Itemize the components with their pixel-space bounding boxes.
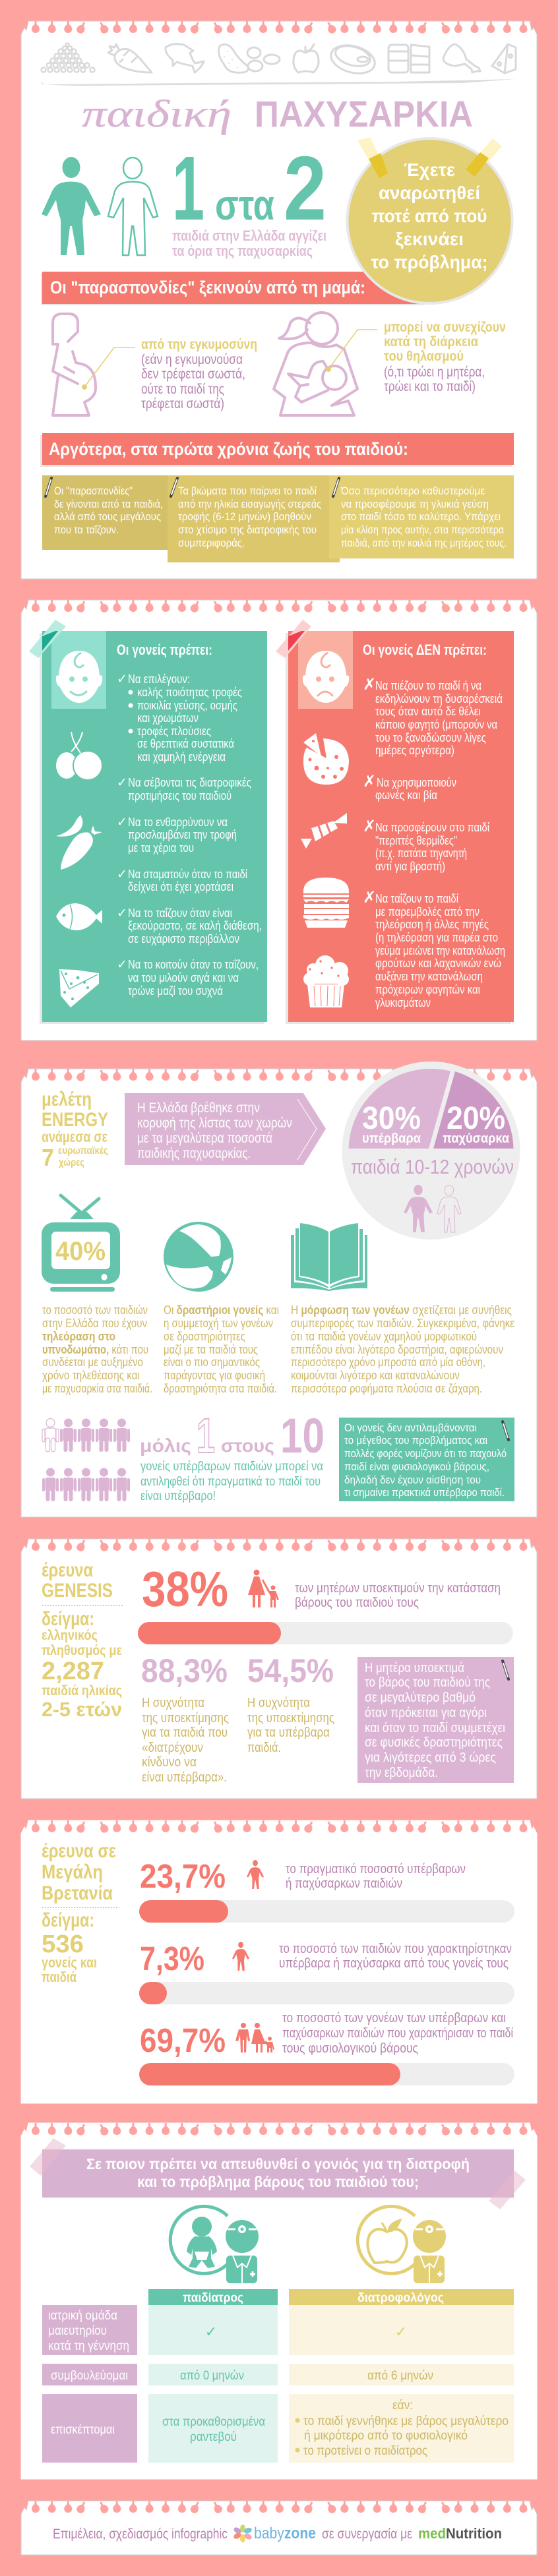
stat: 88,3%: της υποεκτίμησης [142, 1711, 229, 1725]
text: GENESIS study label: GENESIS [42, 1580, 113, 1602]
note: mother underestimates: σε μεγαλύτερο βαθμό [365, 1691, 476, 1705]
icon: pregnant woman [53, 314, 96, 415]
text: ENERGY study label: ανάμεσα σε [42, 1128, 108, 1145]
text: UK study label: 536 [42, 1931, 84, 1958]
text: active parents: Οι δραστήριοι γονείς και [164, 1303, 279, 1317]
note 1: grown-ups: δε γίνονται από τα παιδιά, [54, 498, 163, 510]
row: maternity team: ✓ [205, 2323, 217, 2340]
list: parents should not: φωνές και βία [375, 789, 437, 802]
pie chart: 30% overweight, 20% obese: 30% [362, 1101, 421, 1136]
note: parents don't realise: πολλές φορές νομίζουν ότι το παχουλό [344, 1447, 507, 1460]
row: maternity team [42, 2305, 514, 2355]
note: parents don't realise: δηλαδή δεν έχουν αίσθηση του [344, 1474, 481, 1486]
arrow callout: Greece top of list: παιδικής παχυσαρκίας. [137, 1146, 251, 1161]
text: television in bedroom: στην Ελλάδα που έχουν [42, 1317, 147, 1330]
stat: 69,7%: τους φυσιολογικού βάρους [282, 2041, 418, 2056]
list: parents should: σε θρεπτικά συστατικά [137, 737, 234, 750]
stat: 23,7%: 23,7% [140, 1857, 226, 1895]
text: active parents: παράγοντας για φυσική [164, 1369, 265, 1382]
list: parents should: δείχνει ότι έχει χορτάσει [128, 880, 233, 893]
note 1: grown-ups: Οι "παρασπονδίες" [54, 485, 133, 497]
list: parents should: Να σέβονται τις διατροφικές [128, 776, 251, 789]
list: parents should not: εκδηλώνουν τη δυσαρέσκειά [375, 692, 503, 705]
icon: dietitian [357, 2206, 446, 2283]
list: parents should: Να το ταΐζουν όταν είναι [128, 907, 232, 920]
panel: parents do and don't [21, 600, 537, 1040]
stat: 54,5%: για τα υπέρβαρα [247, 1725, 330, 1740]
column header: paediatrician [148, 2289, 278, 2305]
row: maternity team: ✓ [395, 2323, 407, 2340]
list: parents should: να του μιλούν σιγά και να [128, 971, 239, 984]
stat: 88,3%: για τα παιδιά που [142, 1725, 228, 1740]
text: during breastfeeding: κατά τη διάρκεια [384, 334, 478, 349]
text: GENESIS study label: 2,287 [42, 1658, 104, 1685]
panel: intro [21, 21, 537, 579]
stat: 1 in 2: στα [215, 181, 274, 229]
stat: 54,5% [247, 1652, 334, 1755]
icon: chili and carrot [56, 815, 102, 870]
list: parents should: προτιμήσεις του παιδιού [128, 789, 232, 802]
list: parents should not: κάποιο φαγητό (μπορούν να [375, 718, 497, 731]
list: parents should not: ✗ [363, 773, 376, 791]
icon: child [247, 1860, 264, 1889]
heading: who should the parent ask: και το πρόβλημα βάρους του παιδιού του; [137, 2173, 419, 2190]
list: parents should: και χρωμάτων [137, 711, 199, 725]
list: parents should: ✓ [117, 816, 127, 829]
stat: 1 in 10 [140, 1408, 325, 1463]
list: parents should not [363, 676, 505, 1009]
text: during breastfeeding [384, 320, 506, 394]
icon: candy [301, 813, 347, 849]
list: parents should not: αυξάνει την κατανάλωση [375, 970, 483, 983]
progress bar: 38% [138, 1622, 513, 1644]
note 3: sweet taste: παιδιά, από την κοιλιά της μητέρας τους. [341, 537, 507, 549]
icon: television 40%: 40% [55, 1237, 106, 1266]
divider brush stroke [41, 79, 516, 86]
text: during breastfeeding: (ό,τι τρώει η μητέρα, [384, 365, 485, 380]
list: parents should: Να επιλέγουν: [128, 673, 190, 686]
list: parents should [117, 673, 262, 998]
row: visit when: ή μικρότερο από το φυσιολογικό [304, 2429, 468, 2443]
icon: open book [291, 1223, 367, 1291]
icon: two children figures [42, 157, 158, 255]
row: visit when: το προτείνει ο παιδίατρος [303, 2444, 427, 2458]
text: mothers underestimate [295, 1581, 501, 1610]
stat: 54,5%: της υποεκτίμησης [247, 1711, 334, 1725]
text: parents perceive: είναι υπέρβαρο! [140, 1489, 216, 1503]
callout: yellow circle with tape: αναρωτηθεί [379, 183, 480, 203]
text: GENESIS study label: πληθυσμός με [42, 1643, 122, 1658]
list: parents should: Να το κοιτούν όταν το ταΐζουν, [128, 958, 259, 971]
row: maternity team: ιατρική ομάδα [48, 2309, 117, 2323]
arrow callout: Greece top of list: Η Ελλάδα βρέθηκε στην [137, 1100, 260, 1116]
list: parents should not: γλυκισμάτων [375, 996, 431, 1009]
stat: 7,3%: 7,3% [140, 1940, 204, 1977]
panel: credits [21, 2501, 537, 2555]
text: parents' education [291, 1303, 514, 1395]
text: television in bedroom: τηλεόραση στο [42, 1330, 115, 1343]
callout line: pregnancy [82, 347, 135, 390]
paper sheet [21, 2501, 537, 2555]
list: parents should: ✓ [117, 673, 127, 686]
row: consult from: συμβουλεύομαι [51, 2369, 128, 2383]
note: mother underestimates: το βάρος του παιδιού της [365, 1675, 490, 1690]
list: parents should not: Να χρησιμοποιούν [377, 776, 456, 789]
list: parents should not: (π.χ. πατάτα τηγανητή [375, 847, 467, 860]
list: parents should not: ✗ [363, 818, 376, 835]
text: active parents: μαζί με τα παιδιά τους [164, 1343, 258, 1356]
stat: 7,3%: υπέρβαρα ή παχύσαρκα από τους γονείς τους [279, 1956, 509, 1971]
text: GENESIS study label [42, 1559, 123, 1721]
stat: 23,7%: ή παχύσαρκων παιδιών [286, 1876, 402, 1891]
note 1: grown-ups: αλλά από τους μεγάλους [54, 510, 161, 523]
list: parents should not: (η τηλεόραση για παρέα στο [375, 931, 498, 944]
panel: who to consult [21, 2123, 537, 2479]
text: active parents: σε δραστηριότητες [164, 1330, 245, 1343]
icon: burger [303, 878, 349, 928]
text: parents' education: Η μόρφωση των γονέων σχετίζεται με συνήθεις [291, 1303, 512, 1317]
note 2: experiences: Τα βιώματα που παίρνει το παιδί [178, 485, 317, 497]
list: parents should not: αντί για βραστή) [375, 860, 445, 873]
heading: parents should not: Οι γονείς ΔΕΝ πρέπει: [363, 642, 487, 658]
text: GENESIS study label: δείγμα: [42, 1608, 94, 1630]
list: parents should not: τηλεόραση ή άλλες πηγές [375, 918, 489, 931]
stat: 1 in 2: 2 [284, 138, 326, 239]
callout line: breastfeeding [326, 330, 377, 372]
callout: yellow circle with tape: Έχετε [404, 160, 455, 180]
list: parents should not: "περιττές θερμίδες" [375, 834, 457, 847]
list: parents should not: ✗ [363, 676, 376, 694]
row: visit when: ραντεβού [190, 2430, 237, 2444]
text: GENESIS study label: 2-5 ετών [42, 1698, 122, 1721]
text: parents perceive: αντιληφθεί ότι πραγματικά το παιδί του [140, 1475, 321, 1489]
list: parents should not: του το ξαναδώσουν λίγες [375, 731, 486, 744]
text: during breastfeeding: τρώει και το παιδί) [384, 379, 476, 394]
pie chart: 30% overweight, 20% obese: παχύσαρκα [443, 1131, 510, 1146]
text: television in bedroom: συνδέεται με αυξημένο [42, 1356, 143, 1369]
stat: 1 in 10: στους [221, 1435, 274, 1456]
text: credits: Επιμέλεια, σχεδιασμός infographic [53, 2527, 228, 2542]
text: GENESIS study label: ελληνικός [42, 1628, 98, 1643]
icon: cheese wedge [59, 969, 99, 1007]
panel: ENERGY study [21, 1062, 537, 1517]
list: parents should: ξεκούραστο, σε καλή διάθεση, [128, 919, 262, 932]
paper sheet [21, 1069, 537, 1517]
heading: who should the parent ask: Σε ποιον πρέπει να απευθυνθεί ο γονιός για τη διατροφή [86, 2155, 470, 2172]
note 2: experiences: συμπεριφοράς. [178, 537, 245, 549]
icon: television 40% [42, 1195, 120, 1292]
text: television in bedroom: χρόνο τηλεθέασης και [42, 1369, 140, 1382]
list: parents should: σε ευχάριστο περιβάλλον [128, 932, 239, 945]
paper sheet [21, 1820, 537, 2103]
stat: 23,7% [139, 1857, 514, 1923]
list: parents should: και χαμηλή ενέργεια [137, 750, 226, 764]
text: UK study label: Βρετανία [42, 1882, 113, 1904]
icon: sad baby face [303, 651, 349, 703]
list: parents should not: φρούτων και λαχανικών ενώ [375, 957, 501, 970]
icon: paediatrician [170, 2206, 259, 2283]
list: parents should: ✓ [117, 776, 127, 790]
stat: 23,7%: το πραγματικό ποσοστό υπέρβαρων [286, 1862, 466, 1876]
note: mother underestimates: όταν πρόκειται για αγόρι [365, 1706, 487, 1720]
note: mother underestimates: για λιγότερες από 3 ώρες [365, 1751, 496, 1765]
heading bar: later years [40, 433, 514, 467]
text: active parents: η συμμετοχή των γονέων [164, 1317, 273, 1330]
list: parents should: με τα χέρια του [128, 841, 194, 854]
text: during breastfeeding: μπορεί να συνεχίζουν [384, 320, 506, 335]
panel: UK study [21, 1820, 537, 2103]
stat: 1 in 2 [172, 138, 326, 259]
text: active parents: δραστηριότητα στα παιδιά. [164, 1382, 277, 1395]
note 2: experiences: στο χτίσιμο της διατροφικής του [178, 524, 317, 536]
icon: mother and child [248, 1569, 279, 1607]
icon: children [404, 1185, 461, 1232]
note 3: sweet taste: μία κλίση προς αυτήν, στα περισσότερα [341, 524, 504, 536]
text: during breastfeeding: του θηλασμού [384, 349, 464, 364]
note 3: sweet taste: να προσφέρουμε τη γλυκιά γεύση [341, 498, 489, 510]
row: maternity team: κατά τη γέννηση [48, 2339, 129, 2353]
note 2: experiences [168, 475, 340, 562]
panel: GENESIS study [21, 1539, 537, 1799]
row: consult from: από 6 μηνών [367, 2369, 433, 2383]
text: during pregnancy: τρέφεται σωστά) [141, 396, 224, 411]
row: consult from [42, 2364, 514, 2385]
row: visit when: εάν: [392, 2399, 413, 2412]
note: mother underestimates [357, 1657, 514, 1783]
paper sheet [21, 21, 537, 579]
row: visit when: το παιδί γεννήθηκε με βάρος μεγαλύτερο [303, 2414, 509, 2428]
text: active parents [164, 1303, 279, 1395]
text: UK study label: δείγμα: [42, 1909, 94, 1931]
text: credits: σε συνεργασία με [322, 2527, 412, 2542]
stat: 1 in 10: μόλις [140, 1435, 191, 1456]
note: parents don't realise: παιδί είναι φυσιολογικού βάρους, [344, 1460, 489, 1473]
list: parents should: ✓ [117, 868, 127, 882]
text: GENESIS study label: παιδιά ηλικίας [42, 1683, 122, 1698]
stat: 69,7%: 69,7% [140, 2022, 226, 2059]
icon: child [232, 1942, 249, 1971]
icon: pizza [303, 733, 349, 785]
text: mothers underestimate: βάρους του παιδιού τους [295, 1596, 419, 1610]
stat: 54,5%: 54,5% [247, 1652, 334, 1689]
arrow callout: Greece top of list: κορυφή της λίστας των χωρών [137, 1116, 292, 1131]
panel: parents should not [276, 620, 514, 1024]
list: parents should not: με παρεμβολές από την [375, 905, 480, 918]
list: parents should: προσλαμβάνει την τροφή [128, 828, 237, 841]
note: parents don't realise [339, 1418, 514, 1501]
row: visit when [42, 2394, 514, 2463]
row: visit when: στα προκαθορισμένα [162, 2415, 265, 2429]
text: ENERGY study label: μελέτη [42, 1089, 92, 1110]
callout: yellow circle with tape: ποτέ από πού [372, 206, 487, 226]
text: during pregnancy [141, 337, 257, 411]
pie chart: 30% overweight, 20% obese [342, 1062, 520, 1240]
text: parents' education: ότι τα παιδιά γονέων χαμηλού μορφωτικού [291, 1330, 477, 1343]
icon: family [235, 2023, 274, 2052]
callout: yellow circle with tape [347, 137, 512, 303]
text: ENERGY study label: 7 [42, 1144, 54, 1171]
list: parents should: καλής ποιότητας τροφές [137, 686, 242, 699]
text: during pregnancy: από την εγκυμοσύνη [141, 337, 257, 352]
note: mother underestimates: και όταν το παιδί συμμετέχει [365, 1721, 505, 1735]
stat: 1 in 2: 1 [172, 138, 204, 239]
text: during pregnancy: ούτε το παιδί της [141, 382, 224, 397]
title: παιδική [82, 92, 232, 135]
arrow callout: Greece top of list [125, 1093, 326, 1165]
list: parents should not: Να προσφέρουν στο παιδί [375, 821, 489, 834]
stat: 88,3%: 88,3% [141, 1652, 228, 1689]
text: UK study label: έρευνα σε [42, 1840, 116, 1862]
icons: food row [41, 41, 516, 78]
text: parents perceive [140, 1460, 323, 1503]
list: parents should not: πρόχειρων φαγητών και [375, 983, 480, 996]
list: parents should not: Να πιέζουν το παιδί ή να [375, 679, 481, 692]
icon: fish [56, 903, 102, 930]
text: during pregnancy: δεν τρέφεται σωστά, [141, 367, 245, 382]
text: parents' education: κοιμούνται λιγότερο και καταναλώνουν [291, 1369, 460, 1382]
stat: 54,5%: Η συχνότητα [247, 1696, 310, 1710]
heading: parents should: Οι γονείς πρέπει: [117, 642, 212, 658]
note 1: grown-ups [42, 475, 171, 550]
note: parents don't realise: το μέγεθος του προβλήματος και [344, 1434, 487, 1447]
text: parents' education: συμπεριφορές των παιδιών. Συγκεκριμένα, φάνηκε [291, 1317, 514, 1330]
text: UK study label: Μεγάλη [42, 1861, 103, 1883]
text: UK study label [42, 1840, 119, 1985]
panel: parents should [29, 620, 267, 1024]
note 3: sweet taste [329, 475, 514, 558]
note 1: grown-ups: που τα ταΐζουν. [54, 524, 119, 536]
text: ENERGY study label: χώρες [59, 1157, 84, 1168]
stat: 1 in 2: τα όρια της παχυσαρκίας [172, 243, 313, 259]
paper sheet [21, 600, 537, 1040]
stat: 88,3% [141, 1652, 229, 1785]
note 3: sweet taste: Όσο περισσότερο καθυστερούμε [340, 485, 485, 497]
list: parents should not: τους όταν αυτό δε θέλει [375, 705, 481, 718]
list: parents should: ✓ [117, 958, 127, 972]
callout: yellow circle with tape: ξεκινάει [395, 229, 464, 249]
arrow callout: Greece top of list: με τα μεγαλύτερα ποσοστά [137, 1131, 272, 1146]
stat: 88,3%: κίνδυνο να [142, 1755, 197, 1770]
paper sheet [21, 2123, 537, 2479]
text: during pregnancy: (εάν η εγκυμονούσα [141, 352, 243, 367]
note: mother underestimates: σε φυσικές δραστηριότητες [365, 1735, 503, 1750]
text: parents' education: επιπέδου είναι λιγότερο δραστήρια, αφιερώνουν [291, 1343, 503, 1356]
text: GENESIS study label: έρευνα [42, 1559, 93, 1581]
note 3: sweet taste: στο παιδί τόσο το καλύτερο. Υπάρχει [341, 510, 501, 523]
row: visit when: επισκέπτομαι [51, 2423, 115, 2437]
stat: 88,3%: «διατρέχουν [142, 1741, 203, 1755]
stat: 1 in 2: παιδιά στην Ελλάδα αγγίζει [172, 227, 326, 244]
pie chart: 30% overweight, 20% obese: 20% [447, 1101, 505, 1136]
heading bar: from the mother: Οι "παρασπονδίες" ξεκινούν από τη μαμά: [50, 278, 365, 297]
row: maternity team: μαιευτηρίου [48, 2324, 107, 2338]
column header: paediatrician: παιδίατρος [183, 2291, 243, 2305]
stat: 1 in 10: 10 [280, 1408, 325, 1463]
stat: 1 in 10: 1 [197, 1408, 215, 1463]
stat: 88,3%: είναι υπέρβαρα». [142, 1770, 227, 1785]
note 2: experiences: τροφής (6-12 μηνών) βοηθούν [178, 510, 311, 523]
list: parents should: Να το ενθαρρύνουν να [128, 816, 228, 829]
list: parents should not: Να ταΐζουν το παιδί [375, 892, 458, 905]
list: parents should: ✓ [117, 907, 127, 920]
list: parents should not: γεύμα μειώνει την κατανάλωση [375, 944, 505, 957]
title: ΠΑΧΥΣΑΡΚΙΑ [255, 93, 473, 135]
note: mother underestimates: την εβδομάδα. [365, 1766, 438, 1780]
title [82, 92, 473, 135]
text: ENERGY study label [42, 1089, 108, 1171]
icon: beach ball [164, 1222, 233, 1292]
heading bar: later years: Αργότερα, στα πρώτα χρόνια ζωής του παιδιού: [49, 439, 408, 459]
note: mother underestimates: Η μητέρα υποεκτιμά [365, 1661, 464, 1675]
pie chart: 30% overweight, 20% obese: παιδιά 10-12 χρονών [351, 1155, 514, 1178]
stat: 38%: 38% [142, 1561, 228, 1617]
text: mothers underestimate: των μητέρων υποεκτιμούν την κατάσταση [295, 1581, 501, 1596]
column header: dietitian [289, 2289, 514, 2305]
text: parents' education: περισσότερο χρόνο μπροστά από μία οθόνη, [291, 1356, 485, 1369]
heading: who should the parent ask [30, 2138, 526, 2209]
text: UK study label: παιδιά [42, 1969, 77, 1985]
row: consult from: από 0 μηνών [180, 2369, 244, 2383]
pins on notes [46, 478, 339, 496]
list: parents should: τροφές πλούσιες [137, 725, 211, 738]
text: ENERGY study label: ευρωπαϊκές [58, 1145, 108, 1156]
pictogram: ten parents, one aware [42, 1419, 130, 1501]
text: television in bedroom: υπνοδωμάτιο, κάτι που [42, 1343, 148, 1356]
stat: 69,7%: το ποσοστό των γονέων των υπέρβαρων και [282, 2011, 506, 2025]
stat: 88,3%: Η συχνότητα [142, 1696, 204, 1710]
stat: 69,7% [139, 2011, 514, 2085]
text: parents perceive: γονείς υπέρβαρων παιδιών μπορεί να [140, 1460, 323, 1474]
heading bar: from the mother [41, 272, 423, 305]
list: parents should not: ✗ [363, 889, 376, 907]
text: ENERGY study label: ENERGY [42, 1109, 108, 1131]
stat: 7,3% [139, 1940, 514, 2004]
note 2: experiences: από την ηλικία εισαγωγής στερεάς [178, 498, 321, 510]
text: parents' education: περισσότερα ροφήματα πλούσια σε ζάχαρη. [291, 1382, 482, 1395]
note: parents don't realise: τι σημαίνει πρακτικά υπέρβαρο παιδί. [344, 1486, 505, 1499]
list: parents should: Να σταματούν όταν το παιδί [128, 868, 247, 881]
list: parents should: ποικιλία γεύσης, οσμής [137, 699, 237, 712]
logo: medNutrition: medNutrition [418, 2525, 502, 2542]
callout: yellow circle with tape: το πρόβλημα; [371, 252, 488, 272]
stat: 7,3%: το ποσοστό των παιδιών που χαρακτηρίστηκαν [279, 1942, 512, 1956]
text: credits [53, 2527, 412, 2542]
paper sheet [21, 1539, 537, 1799]
stat: 54,5%: παιδιά. [247, 1741, 281, 1755]
column header: dietitian: διατροφολόγος [357, 2291, 444, 2305]
table: paediatrician vs dietitian [42, 2289, 514, 2463]
text: active parents: είναι ο πιο σημαντικός [164, 1356, 260, 1369]
note: parents don't realise: Οι γονείς δεν αντιλαμβάνονται [344, 1422, 477, 1434]
icon: cupcake [303, 955, 349, 1007]
icon: breastfeeding mother [274, 313, 357, 415]
list: parents should not: ημέρες αργότερα) [375, 744, 454, 757]
icon: plums [56, 732, 102, 780]
logo: babyzone: babyzone [254, 2525, 316, 2542]
list: parents should: τρώνε μαζί του συχνά [128, 984, 223, 998]
text: television in bedroom [42, 1303, 152, 1395]
icon: happy baby face [56, 651, 102, 703]
text: television in bedroom: με παχυσαρκία στα παιδιά. [42, 1382, 152, 1395]
text: television in bedroom: το ποσοστό των παιδιών [42, 1303, 148, 1317]
text: UK study label: γονείς και [42, 1954, 97, 1971]
pie chart: 30% overweight, 20% obese: υπέρβαρα [362, 1131, 421, 1146]
